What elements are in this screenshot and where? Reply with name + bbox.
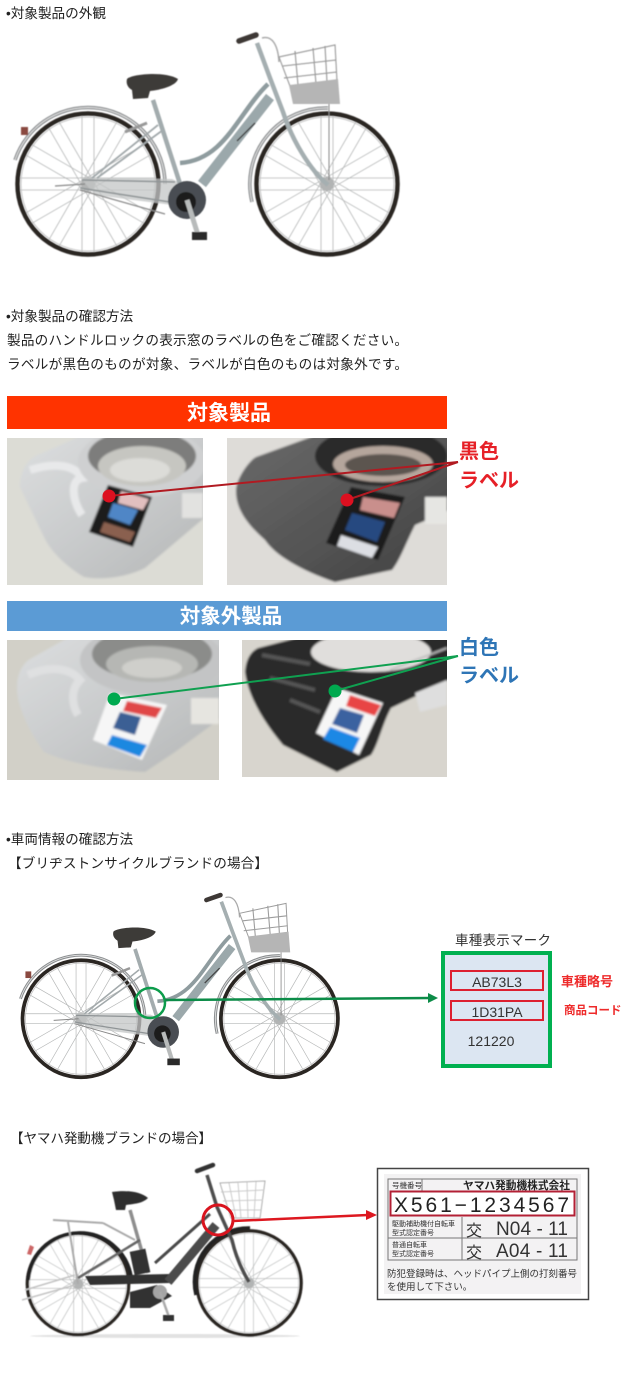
banner: non-target product: 対象外製品 [180, 604, 282, 628]
callout: product code: 商品コード [564, 1003, 622, 1017]
highlighted frame number: X561−1234567 [394, 1194, 569, 1217]
photo: target bicycle [15, 35, 398, 254]
photo: Bridgestone bicycle [20, 895, 338, 1077]
heading: product appearance: •対象製品の外観 [6, 6, 106, 21]
plate row: assisted bicycle: 交 [466, 1222, 482, 1240]
plate note [387, 1268, 578, 1293]
photo: silver handle lock with black label [7, 438, 203, 585]
plate row: assisted bicycle: 型式認定番号 [392, 1228, 434, 1237]
plate row: regular bicycle: 普通自転車 [392, 1240, 427, 1249]
plate row: regular bicycle: 交 [466, 1244, 482, 1262]
plate row: assisted bicycle [392, 1219, 568, 1240]
plate row: regular bicycle: 型式認定番号 [392, 1249, 434, 1258]
plate row: assisted bicycle: N04 - 11 [496, 1219, 568, 1240]
plate row: assisted bicycle: 駆動補助機付自転車 [392, 1219, 455, 1228]
instruction line 1: 製品のハンドルロックの表示窓のラベルの色をご確認ください。 [7, 333, 408, 348]
plate background [378, 1168, 588, 1300]
product code field: 1D31PA [471, 1004, 523, 1020]
callout: white label: ラベル [459, 665, 519, 687]
photo: silver handle lock with white label [7, 640, 219, 780]
callout: black label [459, 440, 519, 492]
sub-heading: Yamaha: 【ヤマハ発動機ブランドの場合】 [10, 1130, 212, 1146]
plate manufacturer: ヤマハ発動機株式会社 [463, 1179, 570, 1192]
marker: red circle and arrow [203, 1205, 377, 1235]
date code: 121220 [468, 1033, 515, 1049]
panel: frame number plate [378, 1168, 588, 1300]
callout: white label: 白色 [459, 636, 499, 659]
heading: check method: •対象製品の確認方法 [6, 309, 134, 324]
plate note: 防犯登録時は、ヘッドパイプ上側の打刻番号 [387, 1268, 578, 1280]
model code field: AB73L3 [472, 974, 522, 990]
pointer lines: black label [102, 462, 458, 506]
instruction line 2: ラベルが黒色のものが対象、ラベルが白色のものは対象外です。 [7, 357, 408, 372]
section: how to identify target product [6, 309, 408, 372]
mark box [443, 953, 550, 1066]
callout: black label: ラベル [459, 470, 519, 492]
photo: black handle lock with white label [242, 640, 447, 777]
callout: white label [459, 636, 519, 687]
pointer lines: white label [108, 656, 458, 706]
callout: model abbreviation: 車種略号 [561, 974, 613, 989]
heading: vehicle information: •車両情報の確認方法 [6, 832, 134, 847]
banner: target product [7, 396, 447, 429]
banner: non-target product [7, 601, 447, 631]
mark title: 車種表示マーク [455, 933, 551, 948]
photo: Yamaha bicycle [22, 1165, 301, 1338]
plate small label: 号機番号 [392, 1180, 422, 1190]
plate row: regular bicycle: A04 - 11 [496, 1241, 568, 1262]
panel: vehicle type mark [443, 933, 551, 1066]
callout: black label: 黒色 [459, 440, 499, 463]
plate row: regular bicycle [392, 1240, 568, 1262]
marker: green circle and arrow [135, 988, 438, 1018]
banner: target product: 対象製品 [187, 402, 271, 425]
sub-heading: Bridgestone: 【ブリヂストンサイクルブランドの場合】 [8, 855, 268, 871]
plate table [388, 1179, 577, 1260]
photo: dark handle lock with black label [227, 438, 447, 585]
plate note: を使用して下さい。 [387, 1281, 472, 1293]
